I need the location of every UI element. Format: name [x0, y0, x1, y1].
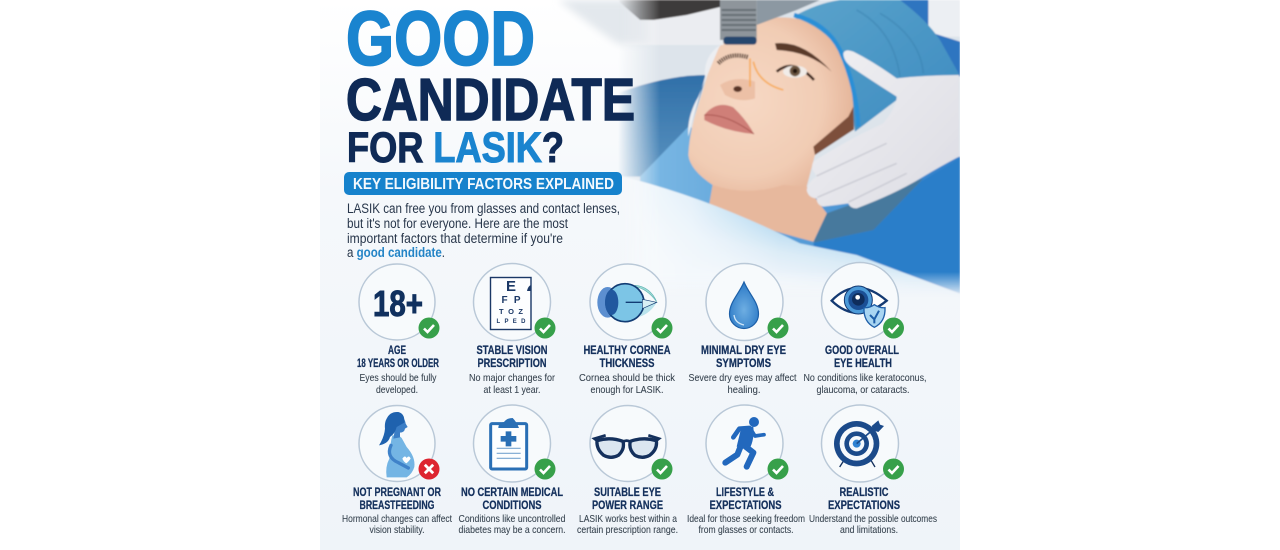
badge: check: [768, 318, 788, 338]
badge: check: [883, 318, 904, 338]
icon: eye chart: F P: [502, 295, 521, 306]
subtitle banner: [344, 172, 622, 195]
card: lifestyle and expectations: LIFESTYLE &: [716, 487, 774, 499]
card: healthy cornea thickness: [579, 264, 676, 396]
card: not pregnant or breastfeeding: NOT PREGNANT OR: [353, 487, 442, 499]
card: age: AGE: [388, 345, 406, 357]
card: realistic expectations: and limitations.: [840, 524, 898, 536]
card: good overall eye health: GOOD OVERALL: [825, 345, 899, 357]
title: [346, 0, 635, 172]
card: realistic expectations: Understand the possible outcomes: [809, 513, 937, 525]
intro paragraph: LASIK can free you from glasses and contact lenses,: [347, 201, 620, 216]
icon: eye chart: [490, 278, 531, 330]
card: lifestyle and expectations: EXPECTATIONS: [710, 500, 782, 512]
card: suitable eye power range: POWER RANGE: [592, 500, 663, 512]
icon: eye chart: T O Z: [499, 307, 523, 316]
card: lifestyle and expectations: Ideal for those seeking freedom: [687, 513, 805, 525]
card: not pregnant or breastfeeding: vision stability.: [370, 524, 424, 536]
card: realistic expectations: [809, 405, 937, 536]
card: minimal dry eye symptoms: [688, 264, 797, 396]
card: stable vision prescription: STABLE VISION: [476, 345, 548, 357]
icon: eye with shield: [832, 286, 887, 327]
title: FOR LASIK?: [347, 124, 564, 172]
card: lifestyle and expectations: [687, 405, 805, 536]
card: stable vision prescription: No major changes for: [469, 372, 555, 384]
icon: running person: [725, 417, 764, 467]
card: realistic expectations: REALISTIC: [840, 487, 888, 499]
badge: check: [418, 318, 440, 338]
icon: water drop: [730, 282, 758, 328]
card: no certain medical conditions: NO CERTAIN MEDICAL: [461, 487, 563, 499]
intro paragraph: but it's not for everyone. Here are the most: [347, 216, 568, 231]
card: good overall eye health: EYE HEALTH: [834, 358, 892, 370]
badge: cross: [418, 458, 440, 480]
card: good overall eye health: [804, 262, 926, 396]
icon: target with arrow: [834, 420, 884, 467]
icon: eye chart: L P E D: [496, 319, 526, 325]
badge: check: [652, 458, 672, 480]
card: suitable eye power range: [577, 406, 678, 536]
card: no certain medical conditions: diabetes may be a concern.: [458, 524, 566, 536]
card: age: [357, 264, 440, 396]
badge: check: [883, 458, 904, 480]
card: stable vision prescription: PRESCRIPTION: [478, 358, 546, 370]
card: minimal dry eye symptoms: healing.: [728, 384, 760, 396]
card: no certain medical conditions: CONDITIONS: [482, 500, 542, 512]
card: stable vision prescription: [469, 264, 556, 396]
card: minimal dry eye symptoms: Severe dry eyes may affect: [688, 372, 797, 384]
card: suitable eye power range: SUITABLE EYE: [594, 487, 661, 499]
title: CANDIDATE: [346, 67, 635, 133]
card: stable vision prescription: at least 1 year.: [484, 384, 540, 396]
icon: clipboard: [491, 418, 527, 469]
badge: check: [768, 458, 788, 480]
icon: glasses: [594, 435, 659, 457]
card: good overall eye health: No conditions like keratoconus,: [804, 372, 926, 384]
card: healthy cornea thickness: HEALTHY CORNEA: [584, 345, 670, 357]
icon: eye cross-section: [597, 284, 657, 322]
card: minimal dry eye symptoms: MINIMAL DRY EYE: [701, 345, 786, 357]
icon: 18+: 18+: [373, 283, 423, 324]
badge: check: [534, 458, 556, 480]
card: age: Eyes should be fully: [360, 372, 437, 384]
card: not pregnant or breastfeeding: [342, 406, 452, 536]
intro paragraph: [347, 201, 620, 260]
device edge at upper centre: [558, 0, 650, 44]
card: lifestyle and expectations: from glasses or contacts.: [698, 524, 794, 536]
card: minimal dry eye symptoms: SYMPTOMS: [716, 358, 771, 370]
badge: check: [534, 318, 556, 338]
icon: pregnant silhouette: [379, 412, 415, 477]
card: good overall eye health: glaucoma, or cataracts.: [816, 384, 910, 396]
card: no certain medical conditions: Conditions like uncontrolled: [458, 513, 566, 525]
intro paragraph: a good candidate.: [347, 245, 445, 260]
intro paragraph: important factors that determine if you're: [347, 231, 563, 246]
icon: eye chart: E: [506, 278, 516, 295]
badge: check: [652, 318, 672, 338]
card: age: 18 YEARS OR OLDER: [357, 358, 439, 370]
card: age: developed.: [376, 384, 418, 396]
card: suitable eye power range: LASIK works best within a: [579, 513, 677, 525]
hero photo: patient receiving laser eye treatment: [617, 0, 963, 307]
card: no certain medical conditions: [458, 405, 566, 536]
card: healthy cornea thickness: enough for LASIK.: [590, 384, 664, 396]
page background panel: [320, 0, 960, 550]
subtitle banner: KEY ELIGIBILITY FACTORS EXPLAINED: [353, 176, 614, 193]
card: not pregnant or breastfeeding: Hormonal changes can affect: [342, 513, 452, 525]
card: suitable eye power range: certain prescription range.: [577, 524, 678, 536]
card: healthy cornea thickness: Cornea should be thick: [579, 372, 676, 384]
card: realistic expectations: EXPECTATIONS: [828, 500, 900, 512]
card: not pregnant or breastfeeding: BREASTFEEDING: [360, 500, 435, 512]
card: healthy cornea thickness: THICKNESS: [600, 358, 655, 370]
